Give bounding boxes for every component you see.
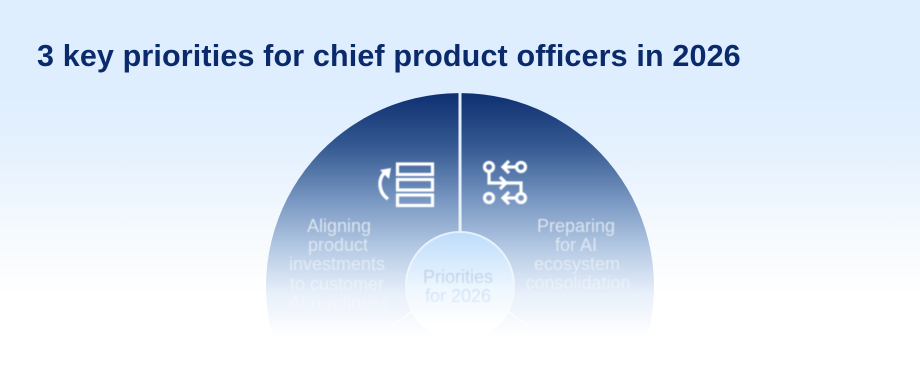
right segment label: Preparing (537, 216, 615, 236)
left segment label: AI readiness (289, 293, 389, 313)
left segment label: investments (289, 254, 385, 274)
left segment label: Aligning (307, 216, 371, 236)
hub label: for 2026 (425, 286, 491, 306)
panel: right segment (462, 93, 654, 338)
center divider (458, 93, 460, 232)
right segment label: consolidation (525, 273, 631, 293)
left segment label: product (308, 235, 368, 255)
panel: left segment (266, 93, 458, 338)
right segment label: for AI (555, 235, 597, 255)
lower segment dividers (392, 312, 528, 326)
hub circle (406, 232, 514, 340)
left segment label: to customer (290, 274, 384, 294)
right segment label: ecosystem (534, 254, 620, 274)
icon: arrow and stacked bars (380, 164, 432, 206)
icon: converging nodes and arrows (484, 161, 526, 204)
hub label: Priorities (423, 267, 493, 287)
title: 3 key priorities for chief product officers in 2026 (37, 39, 741, 73)
